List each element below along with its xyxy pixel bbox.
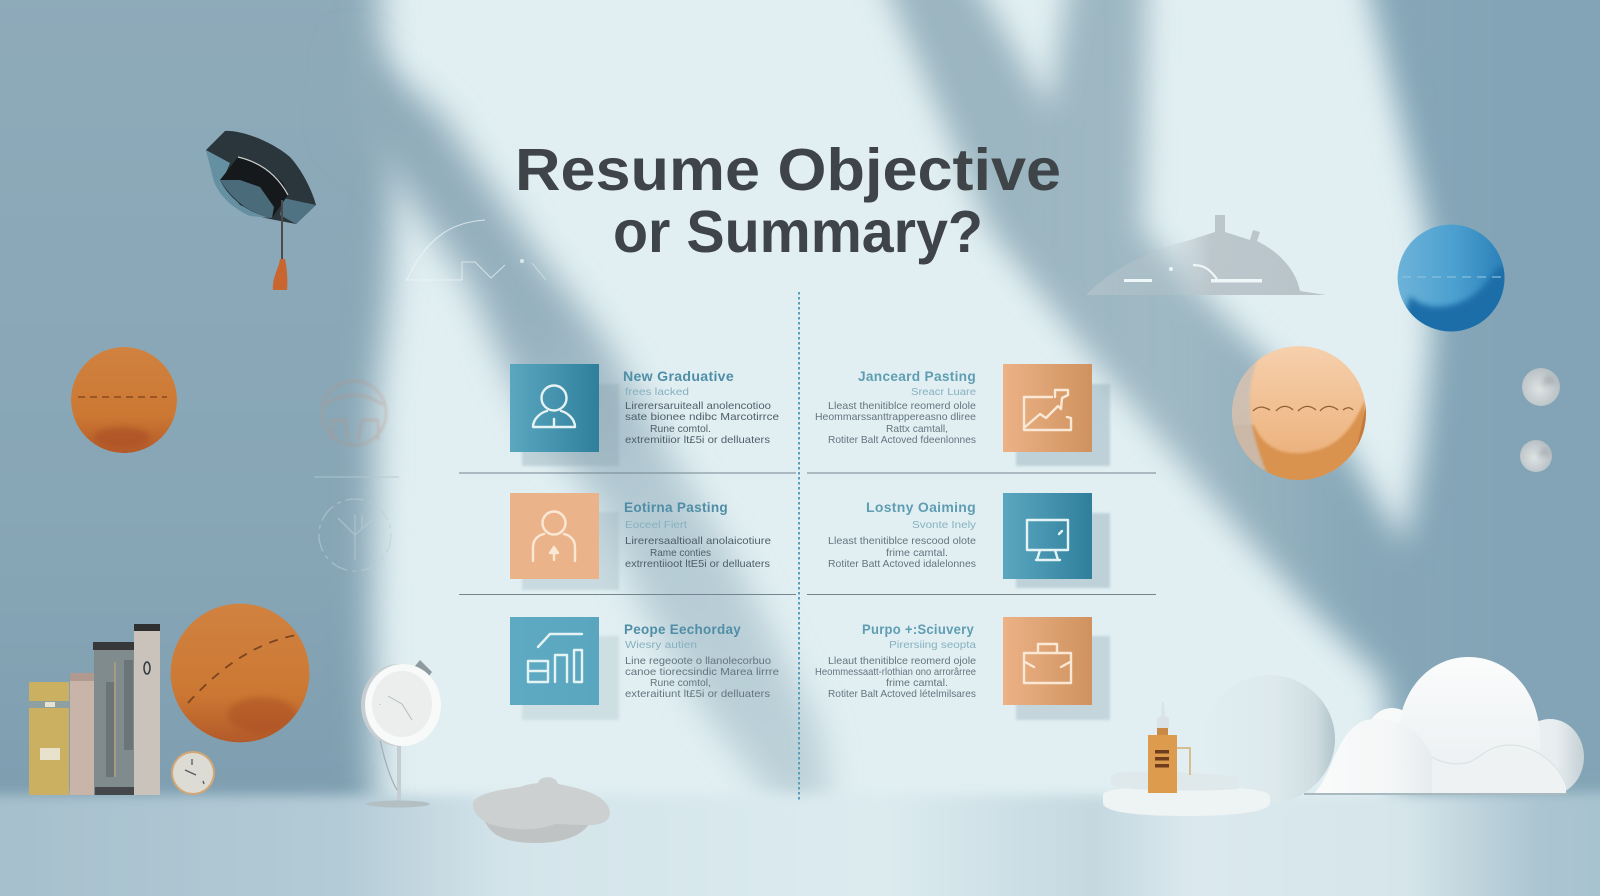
text: new graduative: New Graduative [623, 368, 734, 384]
text: lostny oaiming [828, 499, 977, 570]
text: eotirna pasting [624, 499, 771, 570]
text: new graduative: sate bionee ndibc Marcotirrce [625, 411, 779, 423]
text: purpo sciuvery: Rotiter Balt Actoved lételmilsares [828, 688, 976, 700]
center dashed divider [798, 292, 800, 802]
panel: eotirna pasting [510, 493, 771, 590]
background: floor [0, 795, 1600, 896]
faint divider [314, 476, 399, 478]
icon: graduation cap [206, 131, 316, 290]
text: eotirna pasting: extrrentiioot ltE5i or delluaters [625, 558, 770, 570]
icon: person arrow [533, 512, 575, 561]
text: purpo sciuvery: Pirersiing seopta [889, 639, 976, 651]
row divider right 1 [807, 472, 1156, 474]
text: purpo sciuvery: frime camtal. [886, 677, 948, 689]
decoration: white desk clock [361, 660, 441, 808]
row divider left 2 [459, 594, 796, 596]
text: peope echorday: Peope Eechorday [624, 621, 741, 637]
icon: briefcase [1024, 644, 1071, 683]
decoration: large orange ball [170, 604, 310, 742]
text: peope echorday: Wiesry autien [625, 639, 697, 651]
decoration: books [29, 624, 160, 795]
text: janceard pasting: Rattx camtall, [886, 423, 948, 435]
text: purpo sciuvery: Lleaut thenitiblce reomerd ojole [828, 655, 976, 667]
text: janceard pasting: Janceard Pasting [858, 368, 976, 384]
text: new graduative: Lirerersaruiteall anolencotioo [625, 400, 771, 412]
row divider left 1 [459, 472, 796, 474]
panel: new graduative [510, 364, 779, 466]
text: lostny oaiming: Lostny Oaiming [866, 499, 976, 515]
decoration: ghost dome outline [405, 220, 546, 280]
icon: growth chart [1024, 390, 1071, 430]
decoration: platform and bottle [1103, 702, 1270, 816]
title: or Summary? [613, 199, 983, 265]
text: eotirna pasting: Eoceel Fiert [625, 519, 687, 531]
text: new graduative: extremitiior lt£5i or delluaters [625, 434, 770, 446]
background: left wall shadow [0, 0, 396, 830]
icon: person [533, 386, 575, 427]
text: new graduative [623, 368, 779, 446]
text: purpo sciuvery: Purpo +:Sciuvery [862, 621, 974, 637]
decoration: stone pot [473, 777, 610, 843]
decoration: blue ball [1398, 224, 1504, 332]
text: purpo sciuvery: Heommessaatt-rlothian ono arrorârree [815, 666, 976, 678]
text: janceard pasting: Rotiter Balt Actoved fdeenlonnes [828, 434, 976, 446]
text: eotirna pasting: Eotirna Pasting [624, 499, 728, 515]
decoration: white sphere [1203, 675, 1335, 803]
decoration: peach ball [1232, 346, 1366, 480]
text: janceard pasting: Heommarssanttrappereasno dliree [815, 411, 976, 423]
panel: janceard pasting [815, 364, 1110, 466]
text: janceard pasting: Lleast thenitiblce reomerd olole [828, 400, 976, 412]
text: eotirna pasting: Rame conties [650, 547, 711, 559]
decoration: small clock [171, 751, 215, 795]
text: lostny oaiming: frime camtal. [886, 547, 948, 559]
decoration: small grey balls [1520, 368, 1560, 472]
panel: lostny oaiming [828, 493, 1110, 588]
icon: bar chart [528, 634, 582, 682]
decoration: orange ball left [71, 347, 177, 453]
background: diagonal shadow right [866, 0, 1600, 810]
icon: monitor [1027, 520, 1068, 560]
text: janceard pasting: Sreacr Luare [911, 386, 976, 398]
icon: faint dial [319, 499, 391, 571]
panel: purpo sciuvery [815, 617, 1110, 720]
text: peope echorday: Rune comtol, [650, 677, 711, 689]
text: eotirna pasting: Lirerersaaltioall anolaicotiure [625, 535, 771, 547]
title [515, 137, 1061, 265]
text: peope echorday [624, 621, 779, 700]
text: lostny oaiming: Lleast thenitiblce rescood olote [828, 535, 976, 547]
text: new graduative: frees lacked [625, 386, 689, 398]
text: lostny oaiming: Rotiter Batt Actoved idalelonnes [828, 558, 976, 570]
text: lostny oaiming: Svonte Inely [912, 519, 977, 531]
icon: faint helmet [322, 381, 386, 445]
text: janceard pasting [815, 368, 976, 446]
text: peope echorday: Line regeoote o llanolecorbuo [625, 655, 771, 667]
panel: peope echorday [510, 617, 779, 720]
decoration: ghost dome right [1086, 215, 1326, 295]
background: diagonal shadow left [340, 40, 830, 810]
title: Resume Objective [515, 137, 1061, 203]
text: peope echorday: canoe tiorecsindic Marea lirrre [625, 666, 779, 678]
text: purpo sciuvery [815, 621, 976, 700]
decoration: cloud [1304, 657, 1584, 795]
row divider right 2 [807, 594, 1156, 596]
text: peope echorday: exteraitiunt lt£5i or delluaters [625, 688, 770, 700]
text: new graduative: Rune comtol. [650, 423, 711, 435]
